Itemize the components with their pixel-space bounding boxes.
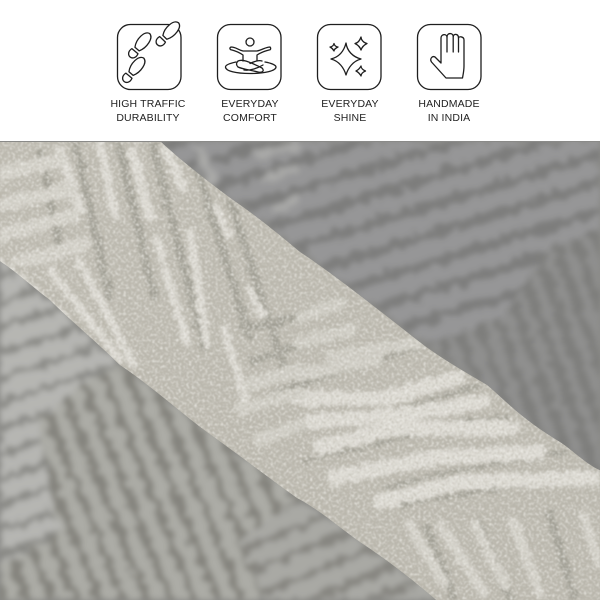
darker ribs on roll <box>40 141 600 600</box>
caption: handmade in india <box>418 98 480 124</box>
rug photo <box>0 141 600 600</box>
caption: handmade in india: HANDMADE <box>418 98 480 110</box>
caption: everyday comfort <box>221 98 279 124</box>
caption: everyday shine <box>321 98 379 124</box>
roll grain <box>0 141 600 600</box>
white pile streaks on roll <box>0 143 600 592</box>
icon: footprints <box>116 21 182 90</box>
icon: person meditating <box>216 24 282 90</box>
rolled rug <box>0 141 600 600</box>
caption: handmade in india: IN INDIA <box>428 112 470 124</box>
caption: high traffic durability: DURABILITY <box>116 112 180 124</box>
background weave: lower left <box>0 250 450 600</box>
caption: high traffic durability <box>110 98 186 124</box>
background weave: upper right <box>165 142 600 468</box>
caption: everyday comfort: EVERYDAY <box>221 98 279 110</box>
caption: high traffic durability: HIGH TRAFFIC <box>110 98 186 110</box>
icon: sparkles <box>316 24 382 90</box>
caption: everyday shine: SHINE <box>334 112 366 124</box>
icon: hand <box>416 24 482 90</box>
caption: everyday comfort: COMFORT <box>223 112 277 124</box>
caption: everyday shine: EVERYDAY <box>321 98 379 110</box>
